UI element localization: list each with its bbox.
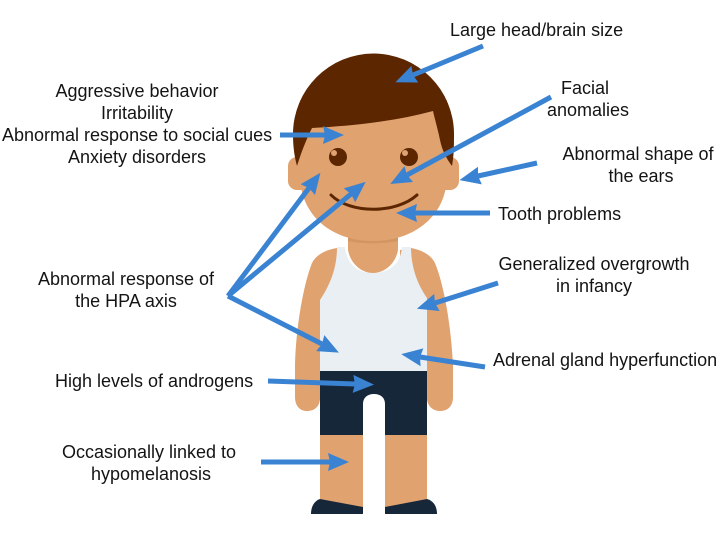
- text: hypomelanosis: Occasionally linked to: [62, 442, 236, 462]
- arrow: HPA to body: [228, 296, 322, 344]
- eyes: [329, 148, 418, 166]
- arrows: [228, 46, 551, 462]
- arrow: facial anomalies: [407, 97, 551, 175]
- mouth: [331, 195, 417, 209]
- arrow: head: [413, 46, 483, 75]
- arrow: HPA to ear: [228, 188, 309, 296]
- text: facial anomalies: Facial: [561, 78, 609, 98]
- text: ears: [562, 144, 714, 186]
- text: HPA axis: [38, 269, 214, 311]
- text: behaviours: Anxiety disorders: [68, 147, 206, 167]
- ears: [288, 157, 459, 190]
- text: large head: Large head/brain size: [450, 20, 623, 40]
- arrow: ears: [478, 163, 537, 176]
- arrow: overgrowth: [435, 283, 498, 303]
- text: ears: the ears: [608, 166, 674, 186]
- arms: [295, 248, 453, 411]
- text: adrenal: Adrenal gland hyperfunction: [493, 350, 717, 370]
- arrow: androgens: [268, 381, 355, 384]
- text: overgrowth: Generalized overgrowth: [498, 254, 690, 274]
- text: tooth problems: Tooth problems: [498, 204, 621, 224]
- legs: [320, 430, 427, 510]
- face: [300, 100, 447, 241]
- text: hypomelanosis: hypomelanosis: [91, 464, 211, 484]
- neck: [348, 232, 398, 273]
- text: behaviours: Abnormal response to social cues: [2, 125, 272, 145]
- text: hypomelanosis: [62, 442, 236, 484]
- text: overgrowth: in infancy: [556, 276, 632, 296]
- arrow: behaviour: [280, 132, 325, 138]
- text: androgens: High levels of androgens: [55, 371, 253, 391]
- shorts: [320, 371, 427, 435]
- chin shadow: [348, 236, 398, 243]
- shoes: [311, 499, 437, 514]
- arrow: adrenal: [420, 357, 485, 367]
- arrow: hypomelanosis: [261, 460, 330, 464]
- text: HPA axis: the HPA axis: [75, 291, 177, 311]
- text: behaviours: [2, 81, 272, 167]
- text: facial anomalies: anomalies: [547, 100, 629, 120]
- arrow: teeth: [415, 210, 490, 216]
- text: ears: Abnormal shape of: [562, 144, 714, 164]
- text: HPA axis: Abnormal response of: [38, 269, 214, 289]
- illustration: child: [288, 54, 459, 514]
- hair: [293, 54, 454, 166]
- text: overgrowth: [498, 254, 690, 296]
- tank top: [320, 247, 427, 371]
- arrow: HPA to face: [228, 194, 351, 296]
- text: behaviours: Irritability: [101, 103, 173, 123]
- text: facial anomalies: [547, 78, 629, 120]
- text: behaviours: Aggressive behavior: [55, 81, 219, 101]
